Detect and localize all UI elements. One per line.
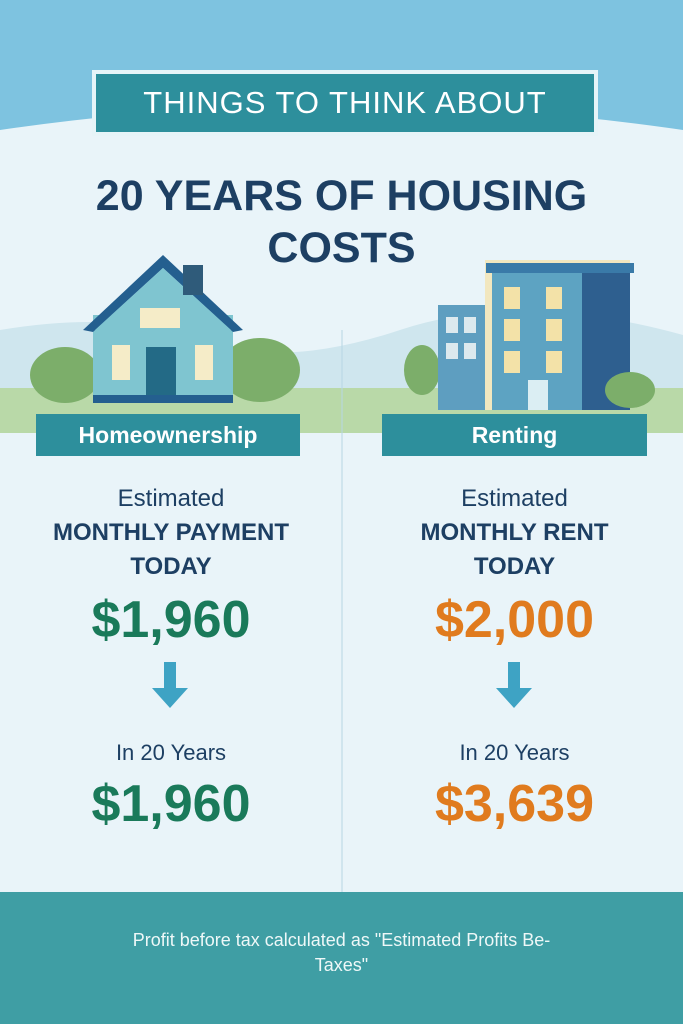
- arrow: [496, 662, 532, 708]
- panel: renting costs: [420, 485, 608, 833]
- text: monthly rent label: TODAY: [474, 553, 555, 580]
- panel: homeownership costs: [53, 485, 289, 833]
- title: COSTS: [267, 224, 416, 272]
- value: today: $1,960: [91, 591, 251, 649]
- arrow: [152, 662, 188, 708]
- label: homeownership: Homeownership: [79, 422, 257, 448]
- text: monthly rent label: [420, 485, 608, 580]
- value: 20 years: $1,960: [91, 775, 251, 833]
- text: monthly payment label: Estimated: [118, 485, 224, 512]
- text: in 20 years: In 20 Years: [459, 740, 570, 765]
- text: monthly rent label: MONTHLY RENT: [420, 519, 608, 546]
- footnote text: [133, 930, 550, 975]
- footnote text: Profit before tax calculated as "Estimated Profits Be-: [133, 930, 550, 950]
- icon: house: [30, 255, 300, 403]
- value: 20 years: $3,639: [435, 775, 594, 833]
- label: renting: Renting: [472, 422, 557, 448]
- banner: things to think about: THINGS TO THINK ABOUT: [143, 85, 547, 120]
- text: monthly payment label: TODAY: [130, 553, 212, 580]
- banner: things to think about: [92, 70, 598, 136]
- footnote text: Taxes": [315, 955, 368, 975]
- text: monthly payment label: [53, 485, 289, 580]
- text: monthly payment label: MONTHLY PAYMENT: [53, 519, 289, 546]
- title: [96, 172, 587, 272]
- icon: apartment building: [404, 260, 655, 410]
- label: homeownership: [36, 414, 300, 456]
- text: monthly rent label: Estimated: [461, 485, 568, 512]
- footer: [0, 892, 683, 1024]
- title: 20 YEARS OF HOUSING: [96, 172, 587, 220]
- label: renting: [382, 414, 647, 456]
- value: today: $2,000: [435, 591, 594, 649]
- text: in 20 years: In 20 Years: [116, 740, 226, 765]
